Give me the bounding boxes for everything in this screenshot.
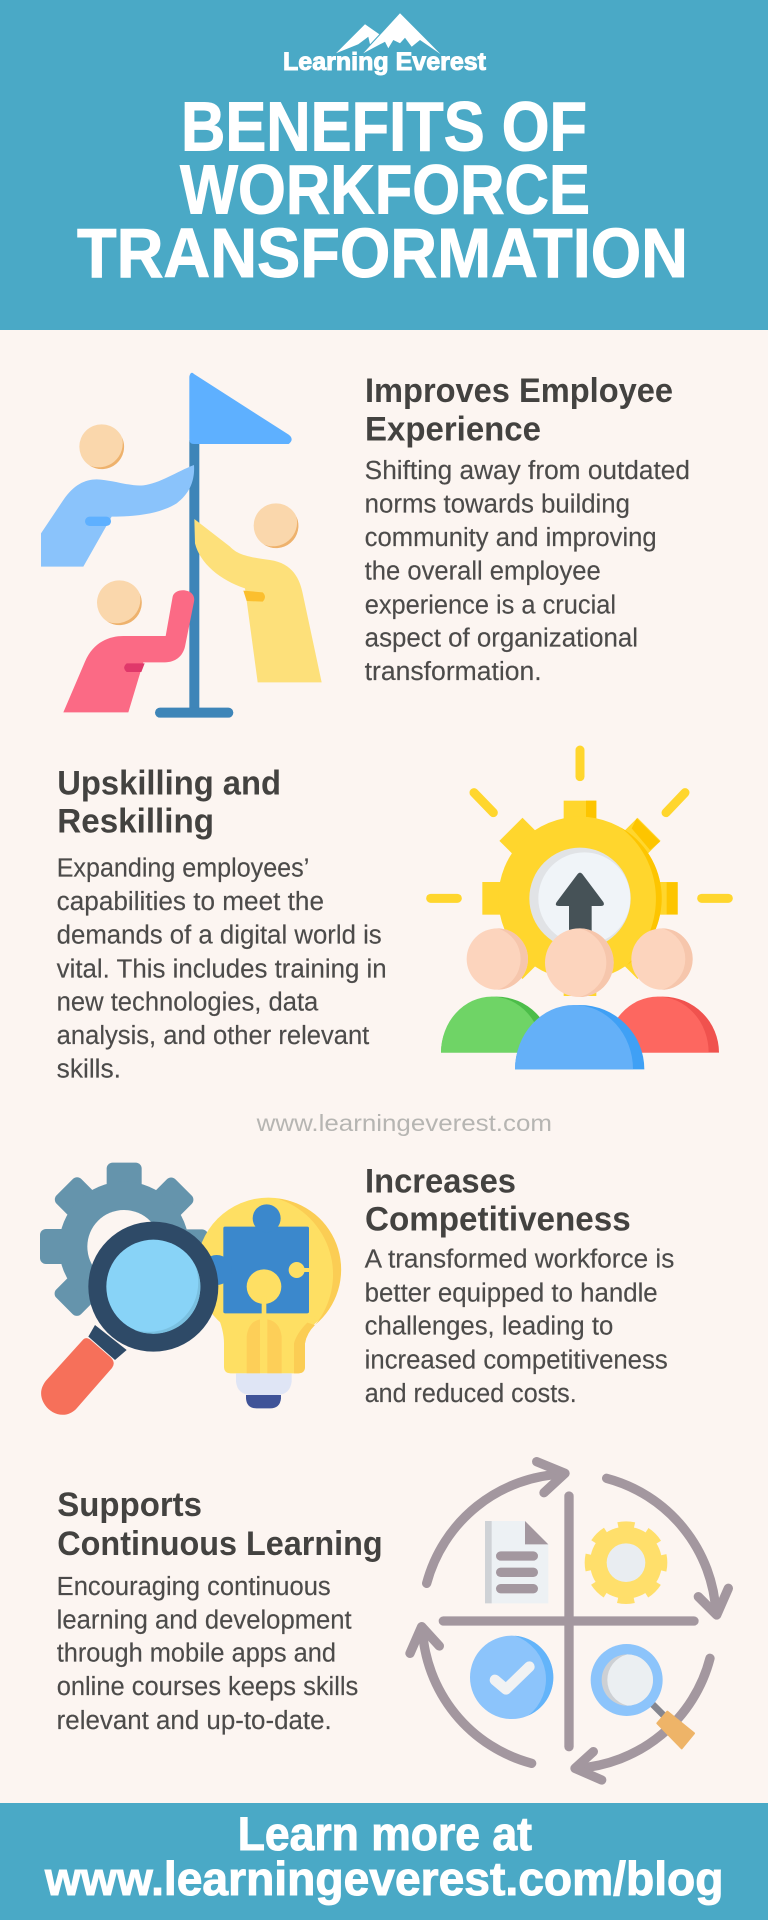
text block	[365, 1246, 674, 1408]
text block: and reduced costs.	[365, 1380, 577, 1408]
text block: norms towards building	[365, 491, 630, 519]
footer call to action: www.learningeverest.com/blog	[44, 1852, 724, 1905]
text block: A transformed workforce is	[365, 1246, 674, 1274]
title	[77, 88, 688, 292]
text block: online courses keeps skills	[57, 1673, 358, 1701]
title: WORKFORCE	[180, 150, 590, 228]
text block: skills.	[57, 1055, 121, 1083]
icon: three people raising a flag	[41, 373, 322, 718]
text block: relevant and up-to-date.	[57, 1707, 332, 1735]
panel: supports continuous learning	[57, 1462, 728, 1780]
text block: better equipped to handle	[365, 1279, 658, 1307]
footer call to action: Learn more at	[238, 1807, 532, 1860]
text block: through mobile apps and	[57, 1640, 336, 1668]
text block: vital. This includes training in	[57, 955, 387, 983]
text block: learning and development	[57, 1606, 352, 1634]
heading: Reskilling	[57, 803, 214, 841]
heading	[365, 1163, 631, 1239]
heading: Upskilling and	[57, 764, 281, 802]
icon: gear with up arrow above three people	[431, 750, 728, 1069]
heading	[365, 372, 673, 449]
logo: Learning Everest	[283, 13, 487, 76]
title: TRANSFORMATION	[77, 214, 688, 292]
text block: demands of a digital world is	[57, 921, 382, 949]
text block: increased competitiveness	[365, 1346, 668, 1374]
heading: Experience	[365, 411, 541, 449]
logo wordmark: Learning Everest	[283, 48, 487, 76]
heading: Increases	[365, 1163, 516, 1201]
text block: experience is a crucial	[365, 591, 616, 619]
footer banner	[0, 1803, 768, 1920]
watermark url: www.learningeverest.com	[256, 1110, 552, 1136]
panel: increases competitiveness	[40, 1163, 674, 1415]
heading: Competitiveness	[365, 1201, 631, 1239]
text block: analysis, and other relevant	[57, 1022, 369, 1050]
heading	[57, 764, 281, 841]
text block: challenges, leading to	[365, 1313, 613, 1341]
icon: mountain peaks	[336, 13, 441, 54]
text block: aspect of organizational	[365, 625, 638, 653]
text block	[57, 855, 387, 1083]
heading: Continuous Learning	[57, 1525, 383, 1563]
text block: Shifting away from outdated	[365, 457, 690, 485]
heading	[57, 1486, 383, 1563]
header banner	[0, 0, 768, 330]
text block: the overall employee	[365, 557, 601, 585]
panel: upskilling and reskilling	[57, 750, 728, 1083]
title: BENEFITS OF	[181, 88, 587, 166]
text block: transformation.	[365, 658, 542, 686]
text block: new technologies, data	[57, 989, 319, 1017]
text block: community and improving	[365, 524, 657, 552]
text block	[57, 1573, 358, 1735]
text block: Encouraging continuous	[57, 1573, 331, 1601]
icon: gear, magnifier and lightbulb with puzzle piece	[40, 1163, 341, 1415]
text block: capabilities to meet the	[57, 888, 324, 916]
panel: improves employee experience	[41, 372, 690, 718]
heading: Improves Employee	[365, 372, 673, 410]
footer call to action	[44, 1807, 724, 1905]
icon: continuous improvement cycle	[410, 1462, 728, 1780]
text block	[365, 457, 690, 686]
text block: Expanding employees’	[57, 855, 309, 883]
heading: Supports	[57, 1486, 202, 1524]
